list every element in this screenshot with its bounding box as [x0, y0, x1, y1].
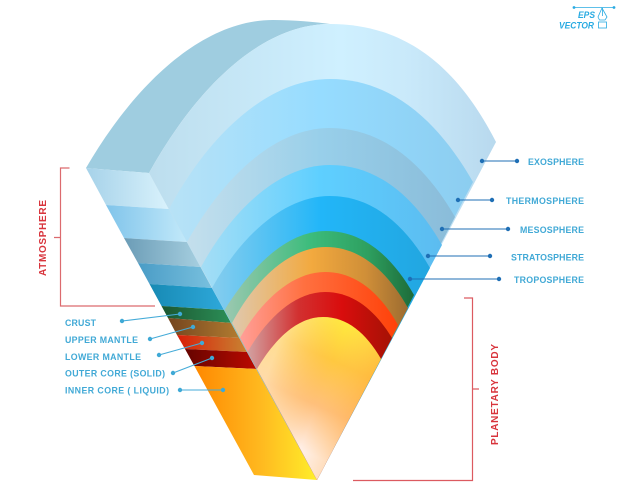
label: outer core: OUTER CORE (SOLID) — [65, 368, 165, 378]
logo: EPS vector: VECTOR — [559, 20, 594, 32]
logo: EPS vector: EPS — [578, 10, 596, 21]
right labels — [408, 157, 584, 285]
label: thermosphere — [456, 196, 584, 206]
label: crust: CRUST — [65, 318, 97, 328]
mesosphere layer — [187, 128, 455, 480]
label: stratosphere: STRATOSPHERE — [511, 252, 584, 262]
troposphere layer — [212, 196, 430, 480]
crust layer — [224, 231, 414, 480]
label: upper mantle: UPPER MANTLE — [65, 335, 138, 345]
label: lower mantle: LOWER MANTLE — [65, 352, 141, 362]
upper mantle layer — [232, 247, 408, 480]
heading: atmosphere: ATMOSPHERE — [38, 200, 49, 276]
logo: EPS vector — [559, 6, 615, 32]
stratosphere layer — [201, 165, 442, 480]
inner core layer — [257, 317, 381, 480]
planet cross-section wedge — [86, 20, 496, 480]
label: inner core: INNER CORE ( LIQUID) — [65, 386, 169, 396]
label: outer core — [65, 356, 214, 378]
label: exosphere: EXOSPHERE — [528, 157, 584, 167]
outer core layer — [248, 292, 392, 480]
label: lower mantle — [65, 341, 204, 362]
side face bands — [86, 168, 317, 480]
label: stratosphere — [426, 252, 584, 262]
label: troposphere — [408, 275, 584, 285]
lower mantle layer — [240, 272, 398, 480]
icon: pen tool — [573, 6, 615, 28]
back curved surface — [86, 20, 330, 173]
label: troposphere: TROPOSPHERE — [514, 275, 584, 285]
label: upper mantle — [65, 325, 195, 345]
label: mesosphere: MESOSPHERE — [520, 225, 584, 235]
planetary body bracket — [353, 298, 501, 480]
label: inner core — [65, 386, 225, 396]
thermosphere layer — [169, 79, 473, 480]
exosphere layer — [149, 24, 496, 480]
left labels — [65, 312, 225, 396]
label: exosphere — [480, 157, 584, 167]
label: crust — [65, 312, 182, 328]
label: thermosphere: THERMOSPHERE — [506, 196, 584, 206]
label: mesosphere — [440, 225, 584, 235]
atmosphere bracket — [38, 168, 155, 306]
heading: planetary body: PLANETARY BODY — [490, 344, 501, 445]
